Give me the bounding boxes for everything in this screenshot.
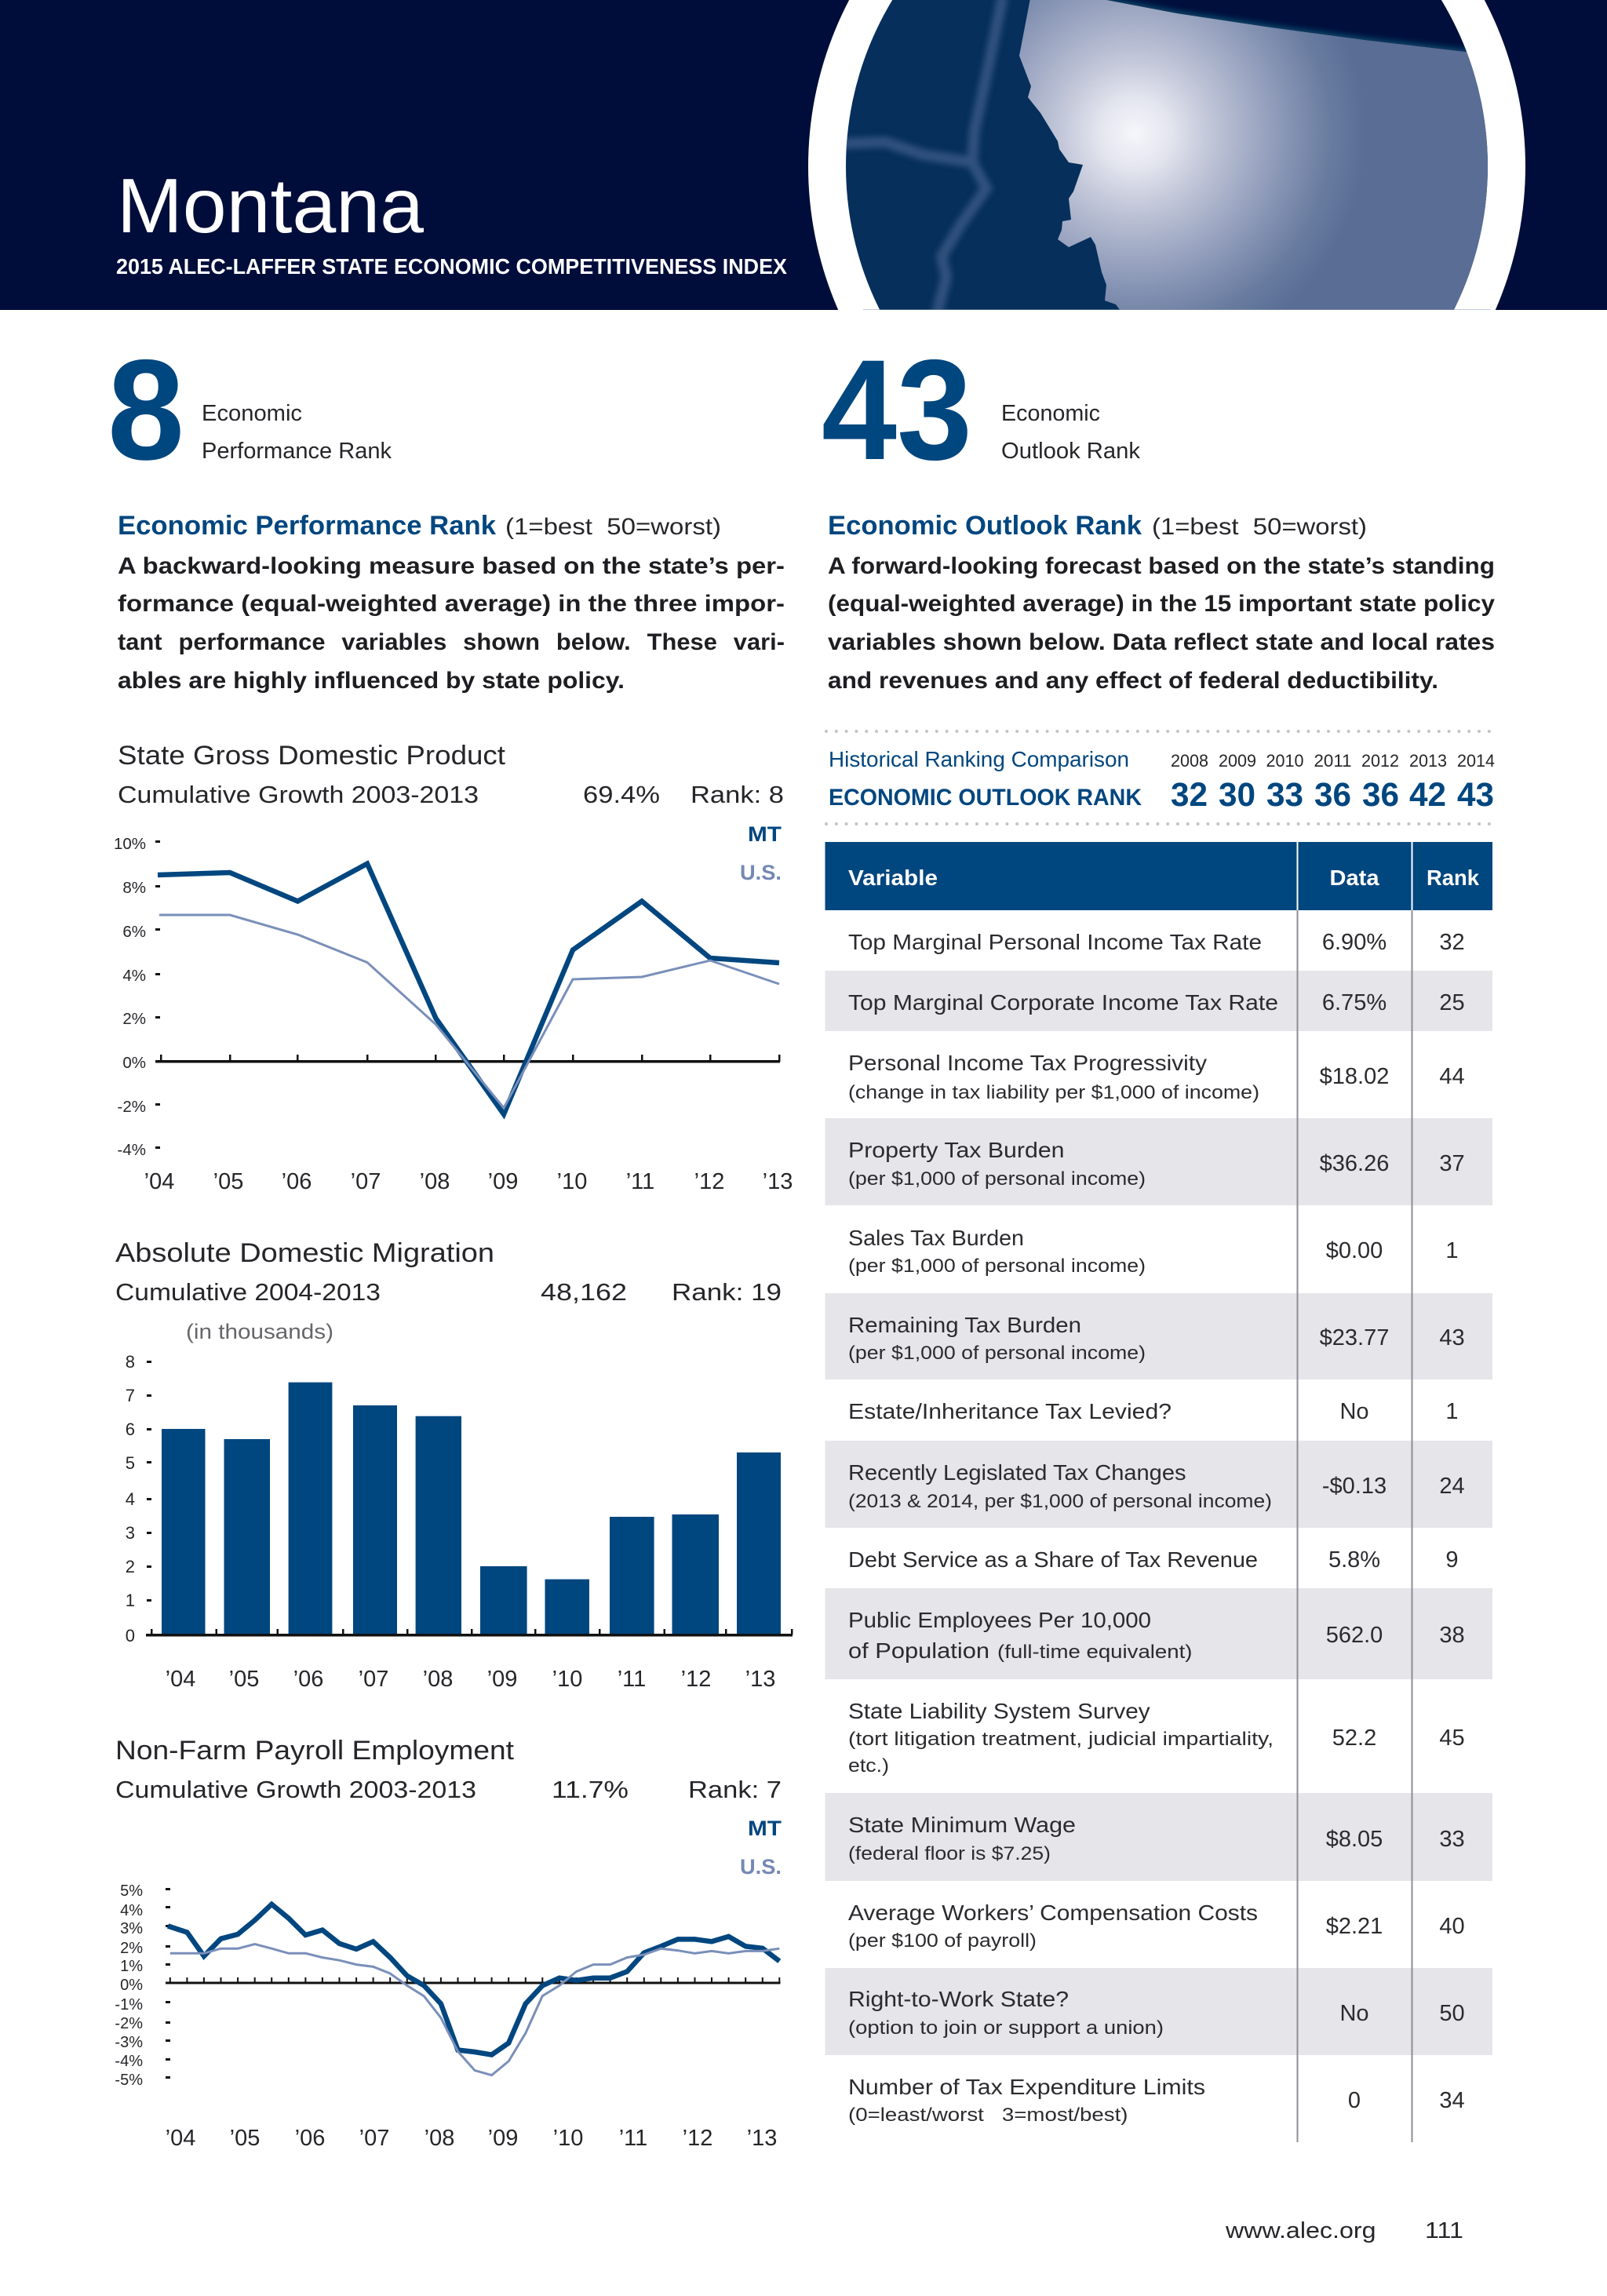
row: workers compensation [848,1901,1465,1952]
line chart: employment growth: ’06 [295,2126,325,2151]
row: state liability system survey [848,1699,1465,1777]
line chart: GDP growth: 2% [122,1010,146,1028]
line chart: GDP growth: ’07 [351,1169,381,1194]
line chart: GDP growth: ’06 [282,1169,312,1194]
line chart: GDP growth: -2% [118,1098,146,1116]
column dividers [1296,842,1412,2142]
panel: historical ranking comparison [826,731,1495,824]
line chart: employment growth: ’09 [488,2126,518,2151]
row: top marginal corporate income tax rate: 6.75% [1322,990,1387,1015]
row: top marginal personal income tax rate: Top Marginal Personal Income Tax Rate [848,930,1262,954]
row: sales tax burden: $0.00 [1326,1238,1383,1263]
chart panel: absolute domestic migration: (in thousands) [186,1320,333,1343]
line chart: employment growth: 4% [120,1902,143,1919]
row: recently legislated tax changes: (2013 & 2014, per $1,000 of personal income) [848,1491,1272,1512]
row: public employees: 562.0 [1326,1623,1383,1648]
bar chart: migration by year: 6 [126,1420,135,1439]
rank badge: economic outlook [822,330,1140,490]
row: tax expenditure limits [848,2075,1465,2126]
bar chart: migration by year: ’05 [229,1667,259,1692]
row: public employees [825,1588,1492,1679]
row: public employees: Public Employees Per 10,000 [848,1608,1151,1632]
text block: outlook rank description [828,511,1495,694]
row: public employees: (full-time equivalent) [997,1642,1193,1663]
row: workers compensation: (per $100 of payroll) [848,1930,1037,1952]
years [1171,751,1495,771]
line chart: employment growth: 1% [120,1958,143,1975]
line chart: GDP growth: ’08 [420,1169,450,1194]
chart panel: non-farm payroll employment [115,1736,782,2151]
rank badge: economic performance [107,330,392,490]
row: sales tax burden [848,1226,1459,1277]
row: state liability system survey: 45 [1439,1726,1465,1751]
text block: performance rank description: A backward-looking measure based on the state’s per- [118,553,785,579]
line chart: employment growth: ’04 [166,2126,195,2151]
row: property tax burden [825,1118,1492,1205]
bar chart: migration by year: 0 [126,1626,135,1645]
row: state minimum wage: $8.05 [1326,1827,1383,1852]
row: sales tax burden: (per $1,000 of personal income) [848,1256,1146,1277]
row: property tax burden: 37 [1439,1151,1465,1176]
row: debt service: 5.8% [1328,1547,1380,1573]
chart panel: state gross domestic product: 69.4% [583,781,660,808]
row: remaining tax burden [825,1293,1492,1379]
row: top marginal corporate income tax rate [825,971,1492,1031]
rank badge: economic outlook: Outlook Rank [1001,439,1140,464]
bar chart: migration by year: ’11 [618,1667,646,1692]
title: Montana [117,162,424,249]
footer: 111 [1425,2218,1463,2243]
line chart: GDP growth: -4% [118,1141,146,1159]
line chart: employment growth: ’13 [747,2126,777,2151]
line chart: employment growth: ’08 [425,2126,454,2151]
row: workers compensation: Average Workers’ Compensation Costs [848,1901,1258,1925]
row: debt service: Debt Service as a Share of Tax Revenue [848,1547,1258,1572]
row: recently legislated tax changes: Recently Legislated Tax Changes [848,1460,1186,1485]
row: tax expenditure limits: Number of Tax Expenditure Limits [848,2075,1205,2099]
bar chart: migration by year: ’10 [552,1667,582,1692]
table: policy variables [825,842,1492,2142]
chart panel: non-farm payroll employment: Non-Farm Payroll Employment [115,1736,515,1766]
line chart: GDP growth: ’11 [626,1169,654,1194]
rank values: 36 [1314,776,1351,814]
text block: outlook rank description: and revenues and any effect of federal deductibility. [828,668,1438,694]
row: remaining tax burden: 43 [1439,1325,1465,1350]
chart panel: absolute domestic migration: Absolute Domestic Migration [115,1238,494,1268]
line chart: GDP growth: ’12 [694,1169,724,1194]
bar chart: migration by year: ’07 [359,1667,388,1692]
bar chart: migration by year: 5 [126,1453,135,1473]
rank values [1171,776,1494,814]
row: remaining tax burden: Remaining Tax Burden [848,1313,1081,1337]
row: recently legislated tax changes: 24 [1439,1474,1465,1499]
years: 2013 [1409,751,1447,771]
chart panel: non-farm payroll employment: 11.7% [552,1776,629,1803]
row: debt service: 9 [1445,1547,1459,1573]
row: estate/inheritance tax: Estate/Inheritance Tax Levied? [848,1399,1172,1423]
row: right-to-work: No [1339,2001,1369,2026]
bar chart: migration by year: ’08 [423,1667,453,1692]
row: recently legislated tax changes [825,1441,1492,1528]
line chart: GDP growth: 4% [122,967,146,985]
row: personal income tax progressivity [825,1031,1492,1118]
bar chart: migration by year: ’06 [293,1667,323,1692]
row: public employees: of Population [848,1638,989,1663]
line chart: employment growth: -1% [115,1996,143,2014]
rank values: 32 [1171,776,1208,814]
table header: Data [1329,866,1379,890]
legend: U.S.: U.S. [740,1855,782,1879]
line chart: employment growth: ’07 [359,2126,389,2151]
line chart: employment growth: -5% [115,2072,143,2089]
row: sales tax burden: Sales Tax Burden [848,1226,1024,1250]
rank badge: economic performance: Performance Rank [202,439,392,464]
header banner [0,0,1607,310]
row: top marginal personal income tax rate: 32 [1439,930,1465,955]
chart panel: absolute domestic migration: Rank: 19 [672,1278,782,1306]
rank values: 42 [1409,776,1446,814]
bar chart: migration by year: 3 [126,1523,135,1543]
row: right-to-work: (option to join or support a union) [848,2017,1164,2039]
row: state liability system survey: State Liability System Survey [848,1699,1150,1723]
rank badge: economic performance: Economic [202,401,302,426]
chart panel: absolute domestic migration [115,1238,793,1692]
years: 2009 [1219,751,1256,771]
row: property tax burden: Property Tax Burden [848,1138,1064,1162]
line chart: GDP growth: 10% [114,835,146,853]
icon: circular map of Montana [808,0,1525,310]
table header [825,842,1492,910]
text block: outlook rank description: A forward-looking forecast based on the state’s standing [828,553,1495,579]
bar chart: migration by year [126,1352,793,1692]
line chart: employment growth: ’12 [683,2126,712,2151]
row: tax expenditure limits: 0 [1348,2088,1361,2113]
years: 2010 [1266,751,1304,771]
years: 2012 [1361,751,1399,771]
row: state liability system survey: etc.) [848,1755,889,1777]
years: 2008 [1171,751,1208,771]
row: workers compensation: 40 [1439,1914,1465,1939]
line chart: GDP growth: ’04 [144,1169,174,1194]
text block: outlook rank description: Economic Outlook Rank [828,511,1142,541]
line chart: GDP growth: ’13 [763,1169,793,1194]
line chart: employment growth: 3% [120,1920,143,1937]
legend: MT: MT [748,1817,782,1840]
row: remaining tax burden: (per $1,000 of personal income) [848,1343,1146,1364]
bar chart: migration by year: 7 [126,1386,135,1405]
chart panel: absolute domestic migration: Cumulative 2004-2013 [115,1278,381,1306]
text block: performance rank description: (1=best 50=worst) [505,514,721,540]
line chart: GDP growth: 0% [122,1054,146,1072]
rank values: 43 [1457,776,1494,814]
line chart: employment growth [115,1882,780,2151]
row: property tax burden: (per $1,000 of personal income) [848,1168,1146,1190]
row: personal income tax progressivity: 44 [1439,1064,1465,1089]
row: state minimum wage: 33 [1439,1827,1465,1852]
line chart: employment growth: 5% [120,1882,143,1900]
panel: historical ranking comparison: ECONOMIC OUTLOOK RANK [829,785,1142,811]
bar chart: migration by year: ’04 [166,1667,195,1692]
line chart: GDP growth: ’10 [557,1169,587,1194]
line chart: GDP growth [114,835,793,1194]
row: state liability system survey: (tort litigation treatment, judicial impartiality, [848,1729,1274,1750]
row: tax expenditure limits: 34 [1439,2088,1465,2113]
line chart: employment growth: ’11 [619,2126,647,2151]
years: 2011 [1314,751,1351,771]
bar chart: migration by year: 4 [126,1489,135,1509]
row: top marginal personal income tax rate [848,930,1465,955]
bar chart: migration by year: 1 [126,1591,135,1610]
line chart: employment growth: ’10 [553,2126,583,2151]
row: personal income tax progressivity: (change in tax liability per $1,000 of income) [848,1082,1259,1103]
text block: performance rank description: Economic Performance Rank [118,511,496,541]
line chart: GDP growth: 6% [122,923,146,941]
panel: historical ranking comparison: Historical Ranking Comparison [829,747,1129,771]
rank badge: economic outlook: Economic [1001,401,1100,426]
line chart: GDP growth: 8% [122,879,146,897]
text block: performance rank description: tant performance variables shown below. These vari- [118,629,785,655]
row: sales tax burden: 1 [1445,1238,1459,1263]
row: debt service [848,1547,1459,1573]
footer: www.alec.org [1225,2218,1376,2243]
line chart: employment growth: ’05 [230,2126,260,2151]
line chart: employment growth: 2% [120,1940,143,1957]
line chart: GDP growth: ’09 [488,1169,518,1194]
rank values: 33 [1266,776,1303,814]
bar chart: migration by year: 8 [126,1352,135,1372]
chart panel: non-farm payroll employment: Cumulative Growth 2003-2013 [115,1776,476,1803]
table header: Rank [1427,866,1479,890]
row: tax expenditure limits: (0=least/worst 3=most/best) [848,2105,1128,2126]
row: estate/inheritance tax: No [1339,1399,1369,1424]
row: top marginal corporate income tax rate: Top Marginal Corporate Income Tax Rate [848,990,1278,1015]
text block: outlook rank description: variables shown below. Data reflect state and local rates [828,629,1495,655]
chart panel: state gross domestic product: State Gross Domestic Product [118,741,506,771]
row: workers compensation: $2.21 [1326,1914,1383,1939]
chart panel: absolute domestic migration: 48,162 [541,1278,627,1306]
row: state minimum wage: State Minimum Wage [848,1813,1076,1837]
row: right-to-work [825,1968,1492,2055]
line chart: employment growth: 0% [120,1977,143,1994]
row: state minimum wage [825,1793,1492,1881]
table header: Variable [848,866,938,890]
row: personal income tax progressivity: Personal Income Tax Progressivity [848,1051,1207,1075]
rank badge: economic performance: 8 [107,330,184,490]
chart panel: state gross domestic product: Rank: 8 [691,781,784,808]
row: recently legislated tax changes: -$0.13 [1322,1474,1387,1499]
row: state liability system survey: 52.2 [1332,1726,1376,1751]
rank values: 36 [1362,776,1399,814]
text block: performance rank description [118,511,785,694]
text block: performance rank description: formance (equal-weighted average) in the three impor- [118,591,785,617]
line chart: GDP growth: ’05 [213,1169,243,1194]
row: right-to-work: Right-to-Work State? [848,1987,1069,2011]
row: top marginal personal income tax rate: 6.90% [1322,930,1387,955]
subtitle: 2015 ALEC-LAFFER STATE ECONOMIC COMPETITIVENESS INDEX [116,254,788,279]
rank values: 30 [1219,776,1255,814]
line chart: employment growth: -4% [115,2053,143,2070]
chart panel: state gross domestic product: Cumulative Growth 2003-2013 [118,781,479,808]
row: estate/inheritance tax: 1 [1445,1399,1459,1424]
text block: outlook rank description: (1=best 50=worst) [1152,514,1367,540]
row: personal income tax progressivity: $18.02 [1320,1064,1389,1089]
row: public employees: 38 [1439,1623,1465,1648]
line chart: employment growth: -3% [115,2034,143,2051]
legend: MT: MT [748,822,782,846]
years: 2014 [1457,751,1495,771]
bar chart: migration by year: ’12 [681,1667,711,1692]
row: property tax burden: $36.26 [1320,1151,1389,1176]
footer [1225,2218,1463,2243]
text block: outlook rank description: (equal-weighted average) in the 15 important state policy [828,591,1495,617]
rank badge: economic outlook: 43 [822,330,972,490]
legend: U.S.: U.S. [740,861,782,884]
line chart: employment growth: -2% [115,2015,143,2032]
text block: performance rank description: ables are highly influenced by state policy. [118,668,625,694]
bar chart: migration by year: 2 [126,1557,135,1576]
chart panel: state gross domestic product [114,741,793,1194]
bar chart: migration by year: ’13 [745,1667,775,1692]
row: right-to-work: 50 [1439,2001,1465,2026]
chart panel: non-farm payroll employment: Rank: 7 [688,1776,782,1803]
row: estate/inheritance tax [848,1399,1459,1424]
row: top marginal corporate income tax rate: 25 [1439,990,1465,1015]
bar chart: migration by year: ’09 [487,1667,517,1692]
row: remaining tax burden: $23.77 [1320,1325,1389,1350]
row: state minimum wage: (federal floor is $7.25) [848,1843,1051,1864]
